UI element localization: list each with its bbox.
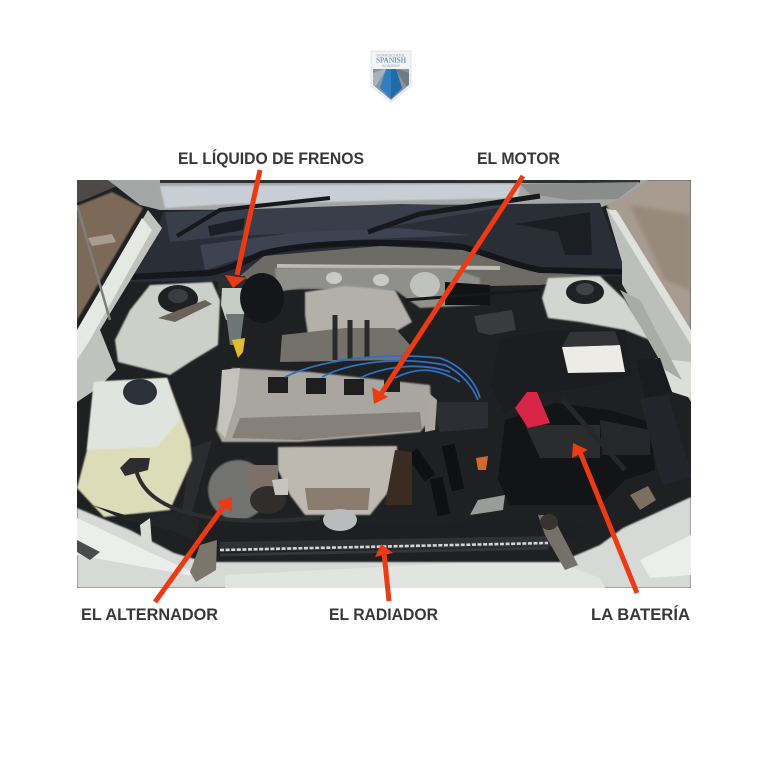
right strut cap (566, 280, 604, 304)
throttle and hoses (432, 402, 488, 432)
arrow: engine (372, 176, 523, 404)
upper right engine bay (410, 272, 440, 298)
band below seal (240, 246, 600, 290)
logo: Homeschool Spanish Academy shield (371, 51, 411, 102)
wiring harness (630, 486, 656, 510)
radiator (220, 536, 551, 556)
left fender rail (77, 210, 162, 402)
radiator brackets (190, 540, 217, 582)
ground left (77, 192, 143, 320)
wipers (177, 198, 330, 236)
label: battery: LA BATERÍA (591, 605, 690, 624)
valve cover (216, 368, 432, 442)
coolant overflow tank (77, 378, 320, 521)
logo: Homeschool Spanish Academy shield: SPANISH (376, 56, 407, 64)
logo: Homeschool Spanish Academy shield: HOMESCHOOL (377, 52, 406, 58)
intake manifold (304, 286, 413, 332)
blue spark plug wires (285, 356, 480, 400)
firewall silver parts (275, 268, 480, 308)
photo base: dark engine bay (77, 180, 691, 588)
fuse box (640, 396, 691, 485)
alternator (208, 460, 288, 520)
right fender rail (606, 208, 691, 402)
right rail inner (620, 290, 682, 380)
left strut tower (115, 282, 220, 375)
logo: Homeschool Spanish Academy shield: ACADEMY (382, 64, 400, 68)
yellow dipstick (232, 338, 245, 358)
engine bay photo (77, 180, 691, 588)
open hood (108, 180, 648, 210)
radiator cap (323, 509, 357, 531)
front slam panel (77, 497, 691, 588)
arrow: brake fluid (225, 170, 260, 288)
label: alternator: EL ALTERNADOR (81, 605, 218, 624)
battery (498, 392, 655, 505)
right strut tower (542, 276, 650, 340)
air box (562, 330, 626, 373)
prop rod (77, 205, 110, 320)
brake reservoir (218, 276, 247, 345)
label: engine: EL MOTOR (477, 149, 560, 168)
red terminal cover (515, 392, 550, 428)
arrow: alternator (155, 497, 232, 602)
label: brake fluid: EL LÍQUIDO DE FRENOS (178, 149, 364, 168)
left strut cap (158, 285, 198, 313)
brake booster (240, 273, 284, 323)
cowl panel (128, 203, 632, 282)
ground right (606, 180, 691, 342)
arrow: battery (572, 443, 637, 593)
heat shield (278, 446, 412, 515)
label: radiator: EL RADIADOR (329, 605, 438, 624)
arrow: radiator (375, 544, 393, 601)
